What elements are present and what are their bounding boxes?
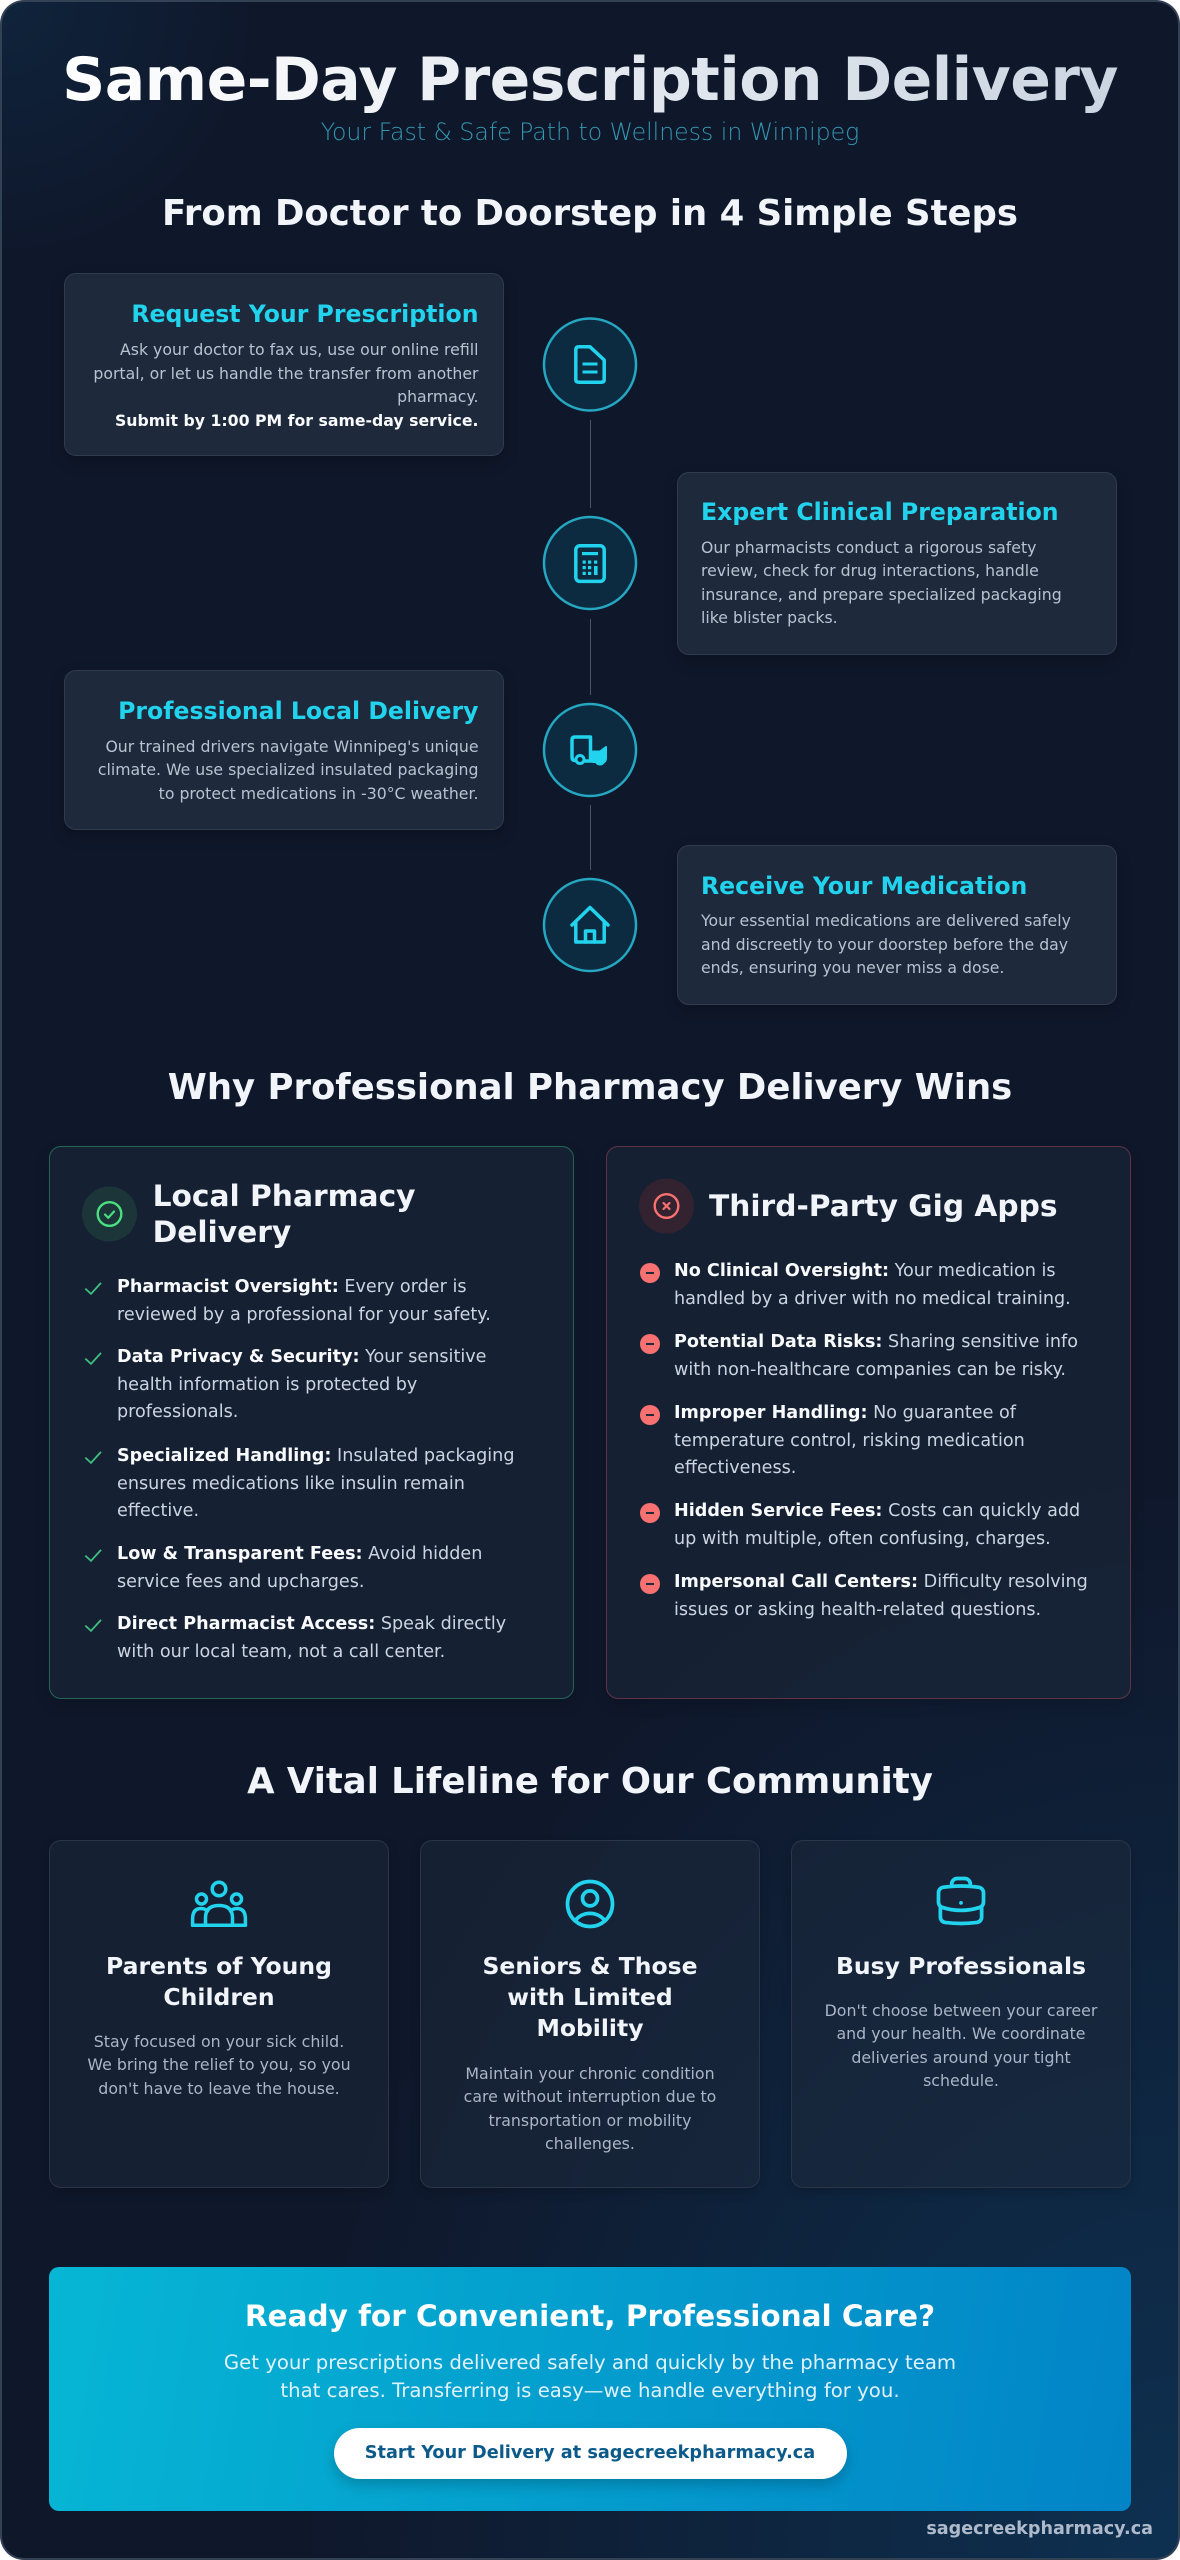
icon: green check circle	[82, 1186, 137, 1242]
icon: family group	[190, 1880, 248, 1927]
title: Same-Day Prescription Delivery	[62, 45, 1118, 115]
card: seniors	[420, 1840, 760, 2188]
card text: Stay focused on your sick child.	[94, 2032, 344, 2050]
cta text: that cares. Transferring is easy—we handle everything for you.	[280, 2379, 900, 2402]
step 4 title: Receive Your Medication	[701, 872, 1027, 900]
cta text: Get your prescriptions delivered safely and quickly by the pharmacy team	[224, 2351, 956, 2374]
panel: local pharmacy delivery: professionals.	[117, 1402, 238, 1422]
call to action panel	[49, 2267, 1131, 2511]
step 3 icon: truck	[542, 702, 638, 798]
card text: deliveries around your tight	[851, 2048, 1071, 2067]
card text: schedule.	[923, 2071, 999, 2090]
step 4 text: Your essential medications are delivered safely	[701, 911, 1071, 930]
drawback 2: with non-healthcare companies can be risky.	[674, 1360, 1066, 1380]
cta text	[224, 2351, 956, 2402]
drawback 5	[640, 1572, 1088, 1620]
cta heading: Ready for Convenient, Professional Care?	[245, 2298, 935, 2332]
panel: third-party gig apps: effectiveness.	[674, 1458, 796, 1478]
card title: Seniors & Those	[482, 1952, 698, 1980]
icon: briefcase	[936, 1876, 986, 1926]
card text: We bring the relief to you, so you	[87, 2055, 351, 2074]
drawback 4	[640, 1501, 1080, 1549]
panel heading: Third-Party Gig Apps	[709, 1188, 1058, 1224]
card title: Mobility	[536, 2014, 644, 2042]
step 2 icon: calculator	[542, 516, 638, 610]
benefit 4: service fees and upcharges.	[117, 1572, 365, 1592]
drawback 1: No Clinical Oversight: Your medication is	[674, 1261, 1056, 1281]
benefit 2: health information is protected by	[117, 1375, 417, 1395]
card text: transportation or mobility	[489, 2111, 691, 2130]
step 1 title: Request Your Prescription	[131, 300, 478, 328]
drawback 5: issues or asking health-related questions.	[674, 1600, 1041, 1620]
panel: third-party gig apps	[606, 1146, 1131, 1699]
card text	[464, 2064, 716, 2153]
panel: local pharmacy delivery	[49, 1146, 574, 1699]
step 4 icon: house	[542, 878, 638, 972]
step 1 text: Submit by 1:00 PM for same-day service.	[115, 411, 478, 430]
step 1 text: pharmacy.	[397, 387, 478, 406]
drawback 4: up with multiple, often confusing, charges.	[674, 1529, 1051, 1549]
subtitle: Your Fast & Safe Path to Wellness in Winnipeg	[321, 118, 859, 146]
footer url: sagecreekpharmacy.ca	[926, 2519, 1153, 2539]
card title	[482, 1952, 698, 2042]
drawback 2: Potential Data Risks: Sharing sensitive info	[674, 1332, 1078, 1352]
card title	[106, 1952, 332, 2011]
step 3 text: climate. We use specialized insulated packaging	[98, 760, 478, 779]
card text: Maintain your chronic condition	[465, 2064, 715, 2082]
card text: challenges.	[545, 2134, 635, 2153]
step 2 text	[701, 538, 1062, 627]
step 1 card	[64, 273, 504, 456]
card text: Don't choose between your career	[825, 2000, 1097, 2020]
step 4 text: and discreetly to your doorstep before the day	[701, 935, 1068, 954]
step 1 text	[93, 340, 478, 430]
drawback 1: handled by a driver with no medical training.	[674, 1289, 1071, 1309]
benefit 4: Low & Transparent Fees: Avoid hidden	[117, 1544, 482, 1564]
drawback 4: Hidden Service Fees: Costs can quickly add	[674, 1501, 1080, 1521]
heading: steps: From Doctor to Doorstep in 4 Simple Steps	[162, 193, 1018, 234]
step 2 text: insurance, and prepare specialized packaging	[701, 585, 1062, 604]
step 4 text: ends, ensuring you never miss a dose.	[701, 958, 1004, 977]
drawback 1	[640, 1261, 1071, 1309]
connector 2	[590, 619, 591, 695]
benefit 4	[84, 1544, 482, 1592]
drawback 2	[640, 1332, 1078, 1380]
icon: red x circle	[639, 1178, 694, 1234]
benefit 5: with our local team, not a call center.	[117, 1642, 445, 1662]
benefit 2	[84, 1347, 486, 1422]
step 3 title: Professional Local Delivery	[118, 696, 478, 724]
step 3 text: Our trained drivers navigate Winnipeg's unique	[105, 736, 478, 756]
connector 1	[590, 420, 591, 508]
step 2 text: like blister packs.	[701, 608, 838, 627]
step 1 icon: document	[542, 317, 638, 412]
step 4 card	[676, 845, 1116, 1005]
card text: and your health. We coordinate	[836, 2024, 1086, 2043]
step 2 text: review, check for drug interactions, handle	[701, 561, 1039, 580]
card text	[825, 2000, 1098, 2090]
drawback 3	[640, 1403, 1025, 1478]
card text	[87, 2032, 351, 2098]
step 3 text	[98, 736, 478, 803]
panel: local pharmacy delivery: effective.	[117, 1501, 199, 1521]
step 2 title: Expert Clinical Preparation	[701, 498, 1059, 526]
benefit 3: Specialized Handling: Insulated packaging	[117, 1446, 514, 1466]
cta button	[334, 2428, 846, 2479]
benefit 3	[84, 1446, 514, 1521]
step 3 text: to protect medications in -30°C weather.	[159, 784, 478, 803]
card text: don't have to leave the house.	[98, 2079, 340, 2098]
step 4 text	[701, 911, 1071, 977]
step 2 card	[676, 472, 1116, 655]
benefit 5	[84, 1614, 506, 1662]
benefit 1: reviewed by a professional for your safety.	[117, 1305, 491, 1325]
panel heading	[153, 1178, 416, 1250]
heading: community: A Vital Lifeline for Our Community	[247, 1761, 933, 1802]
step 2 text: Our pharmacists conduct a rigorous safety	[701, 538, 1036, 556]
drawback 3: temperature control, risking medication	[674, 1431, 1025, 1451]
benefit 1	[84, 1277, 491, 1325]
heading: comparison: Why Professional Pharmacy Delivery Wins	[168, 1067, 1012, 1108]
card: parents	[49, 1840, 389, 2188]
icon: user circle	[566, 1880, 614, 1928]
step 1 text: portal, or let us handle the transfer from another	[93, 364, 478, 383]
connector 3	[590, 805, 591, 870]
step 1 text: Ask your doctor to fax us, use our online refill	[120, 340, 478, 359]
card: professionals	[791, 1840, 1131, 2188]
card title: with Limited	[507, 1983, 673, 2011]
card title: Parents of Young	[106, 1952, 332, 1980]
step 3 card	[64, 670, 504, 830]
panel heading: Delivery	[153, 1214, 291, 1250]
drawback 3: Improper Handling: No guarantee of	[674, 1403, 1016, 1423]
cta button: Start Your Delivery at sagecreekpharmacy.ca	[365, 2443, 815, 2463]
drawback 5: Impersonal Call Centers: Difficulty resolving	[674, 1572, 1088, 1592]
card title: Busy Professionals	[836, 1952, 1086, 1980]
benefit 5: Direct Pharmacist Access: Speak directly	[117, 1614, 506, 1634]
card title: Children	[163, 1983, 275, 2011]
benefit 2: Data Privacy & Security: Your sensitive	[117, 1347, 486, 1367]
benefit 1: Pharmacist Oversight: Every order is	[117, 1277, 466, 1297]
benefit 3: ensures medications like insulin remain	[117, 1474, 465, 1494]
card text: care without interruption due to	[464, 2087, 716, 2106]
panel heading: Local Pharmacy	[153, 1178, 416, 1214]
